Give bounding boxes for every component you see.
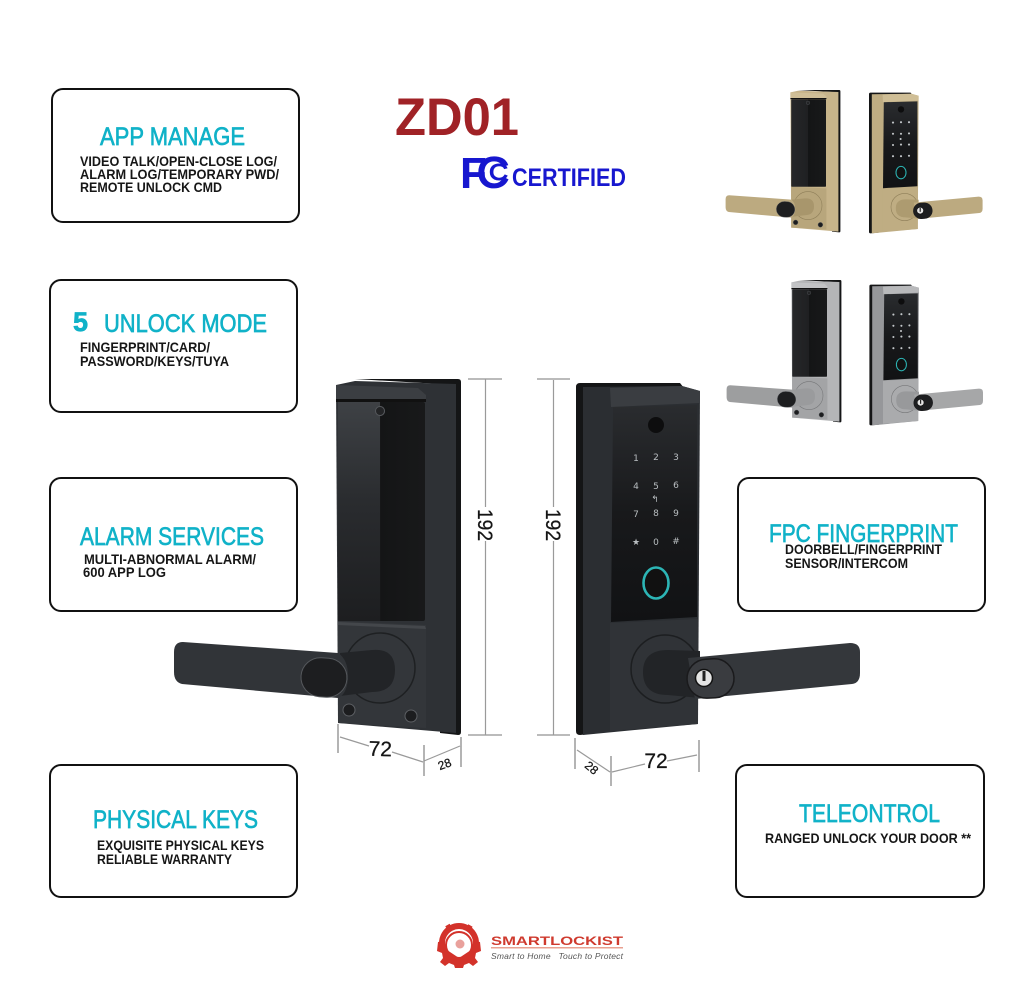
keypad digits: ↰ (651, 495, 659, 505)
keypad digits: 7 (633, 510, 639, 520)
product: silver lock front (869, 285, 983, 425)
text: app manage details: REMOTE UNLOCK CMD (80, 179, 222, 195)
badge: FCC certified: C (489, 159, 508, 185)
dimension: front width: 72 (644, 750, 668, 773)
logo: smartlockist (437, 924, 624, 968)
product: gold lock front (869, 93, 983, 233)
heading: 5 unlock mode (73, 307, 267, 338)
product: gold lock back (726, 90, 840, 232)
badge: FCC certified: C (477, 149, 509, 197)
keypad digits (632, 453, 680, 548)
keypad digits: ★ (632, 538, 640, 548)
product: black lock back (174, 379, 461, 735)
keypad digits: 5 (653, 482, 659, 492)
heading: 5 unlock mode: 5 (73, 307, 88, 337)
heading: teleontrol: TELEONTROL (799, 800, 940, 828)
keypad digits: 2 (653, 453, 659, 463)
dimension: front height: 192 (541, 509, 564, 541)
panel: physical keys (50, 765, 297, 897)
text: alarm details: 600 APP LOG (83, 564, 166, 580)
text: unlock mode details: PASSWORD/KEYS/TUYA (80, 353, 229, 369)
tagline: Smart to Home Touch to Protect (491, 951, 624, 961)
keypad digits: 1 (633, 454, 639, 464)
dimension: back width: 72 (368, 738, 392, 761)
dimension: front depth (575, 738, 611, 786)
brand name: SMARTLOCKIST (491, 936, 623, 948)
heading: fpc fingerprint: FPC FINGERPRINT (769, 520, 958, 548)
product: black lock front (576, 383, 860, 735)
heading: app manage: APP MANAGE (100, 123, 245, 151)
dimension: back depth: 28 (436, 755, 454, 773)
text: physical keys details: RELIABLE WARRANTY (97, 851, 233, 867)
text: physical keys details: EXQUISITE PHYSICAL KEYS (97, 837, 264, 853)
dimension: back depth (424, 737, 461, 776)
heading: physical keys: PHYSICAL KEYS (93, 806, 258, 834)
text: app manage details (80, 153, 279, 195)
dimension: back height: 192 (473, 509, 496, 541)
dimension: front width (612, 740, 699, 773)
title: model name: ZD01 (395, 88, 519, 147)
text: unlock mode details (80, 339, 229, 369)
dimension: front height (537, 379, 570, 735)
text: app manage details: ALARM LOG/TEMPORARY PWD/ (80, 166, 279, 182)
product: silver lock back (727, 280, 841, 422)
text: fingerprint details: DOORBELL/FINGERPRINT (785, 541, 942, 557)
panel: fpc fingerprint (738, 478, 985, 611)
icon: red gear (437, 924, 481, 968)
dimension: back width (338, 724, 423, 762)
keypad digits: 8 (653, 509, 659, 519)
badge: FCC certified (460, 149, 626, 198)
text: alarm details: MULTI-ABNORMAL ALARM/ (84, 551, 256, 567)
keypad digits: 9 (673, 509, 679, 519)
keypad digits: 4 (633, 482, 639, 492)
badge: FCC certified: CERTIFIED (512, 164, 626, 192)
panel: alarm services (50, 478, 297, 611)
keypad digits: # (672, 537, 680, 547)
text: app manage details: VIDEO TALK/OPEN-CLOSE LOG/ (80, 153, 277, 169)
text: fingerprint details (785, 541, 942, 571)
keypad digits: 0 (653, 538, 659, 548)
badge: FCC certified: F (460, 149, 487, 198)
text: physical keys details (97, 837, 264, 867)
panel: unlock mode (50, 280, 297, 412)
keypad digits: 6 (673, 481, 679, 491)
text: fingerprint details: SENSOR/INTERCOM (785, 555, 908, 571)
keypad digits: 3 (673, 453, 679, 463)
panel: app manage (52, 89, 299, 222)
dimension: back height (468, 379, 502, 735)
text: alarm details (83, 551, 256, 580)
text: unlock mode details: FINGERPRINT/CARD/ (80, 339, 210, 355)
heading: alarm services: ALARM SERVICES (80, 523, 264, 551)
dimension: front depth: 28 (582, 758, 601, 778)
text: teleontrol details: RANGED UNLOCK YOUR DOOR ** (765, 830, 971, 846)
panel: teleontrol (736, 765, 984, 897)
heading: 5 unlock mode: UNLOCK MODE (104, 310, 267, 338)
